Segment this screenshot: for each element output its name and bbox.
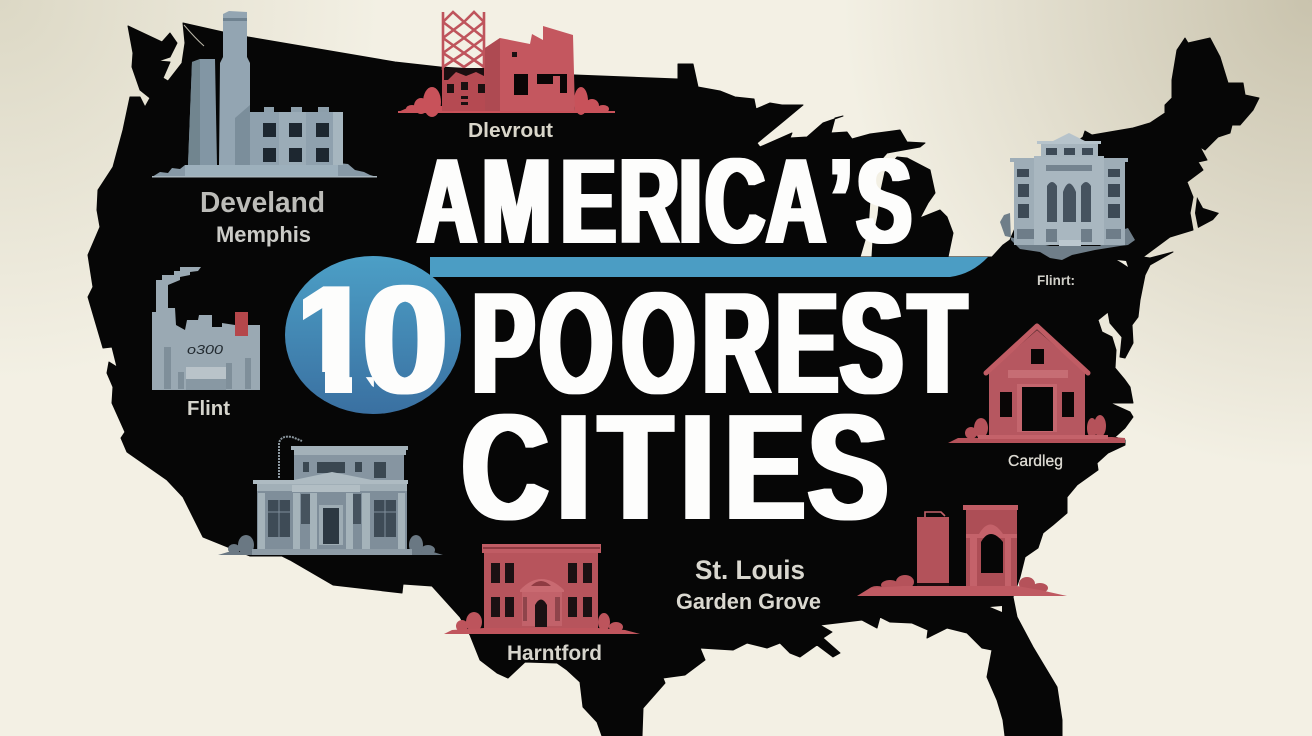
building: Flint factory: o300 [187,342,224,357]
building: columned civic hall [218,437,443,555]
building: Cardleg red house [948,326,1125,443]
building: Harntford brick hall [444,544,640,634]
building: Detroit red ruins [398,12,615,117]
title: America's: AMERICA’S [417,134,912,270]
label: Memphis: Memphis [216,222,311,247]
number 10: 10 [289,253,448,426]
label: Flinrt:: Flinrt: [1037,272,1075,288]
label: Flint: Flint [187,398,230,420]
label: Dlevrout: Dlevrout [468,120,553,142]
title: Poorest: POOREST [472,261,966,424]
building: Flint factory [152,267,260,390]
label: Cardleg: Cardleg [1008,453,1063,470]
blue badge with bar [285,253,988,426]
label: Develand: Develand [200,187,325,219]
building: red storage tank and archway [857,505,1067,596]
label: Garden Grove: Garden Grove [676,589,821,614]
building: neoclassical columned block [1000,133,1135,260]
building: Cleveland smokestacks and factory [152,11,377,178]
title: Cities: CITIES [462,382,888,551]
label: St. Louis: St. Louis [695,555,805,585]
label: Harntford: Harntford [507,642,602,665]
